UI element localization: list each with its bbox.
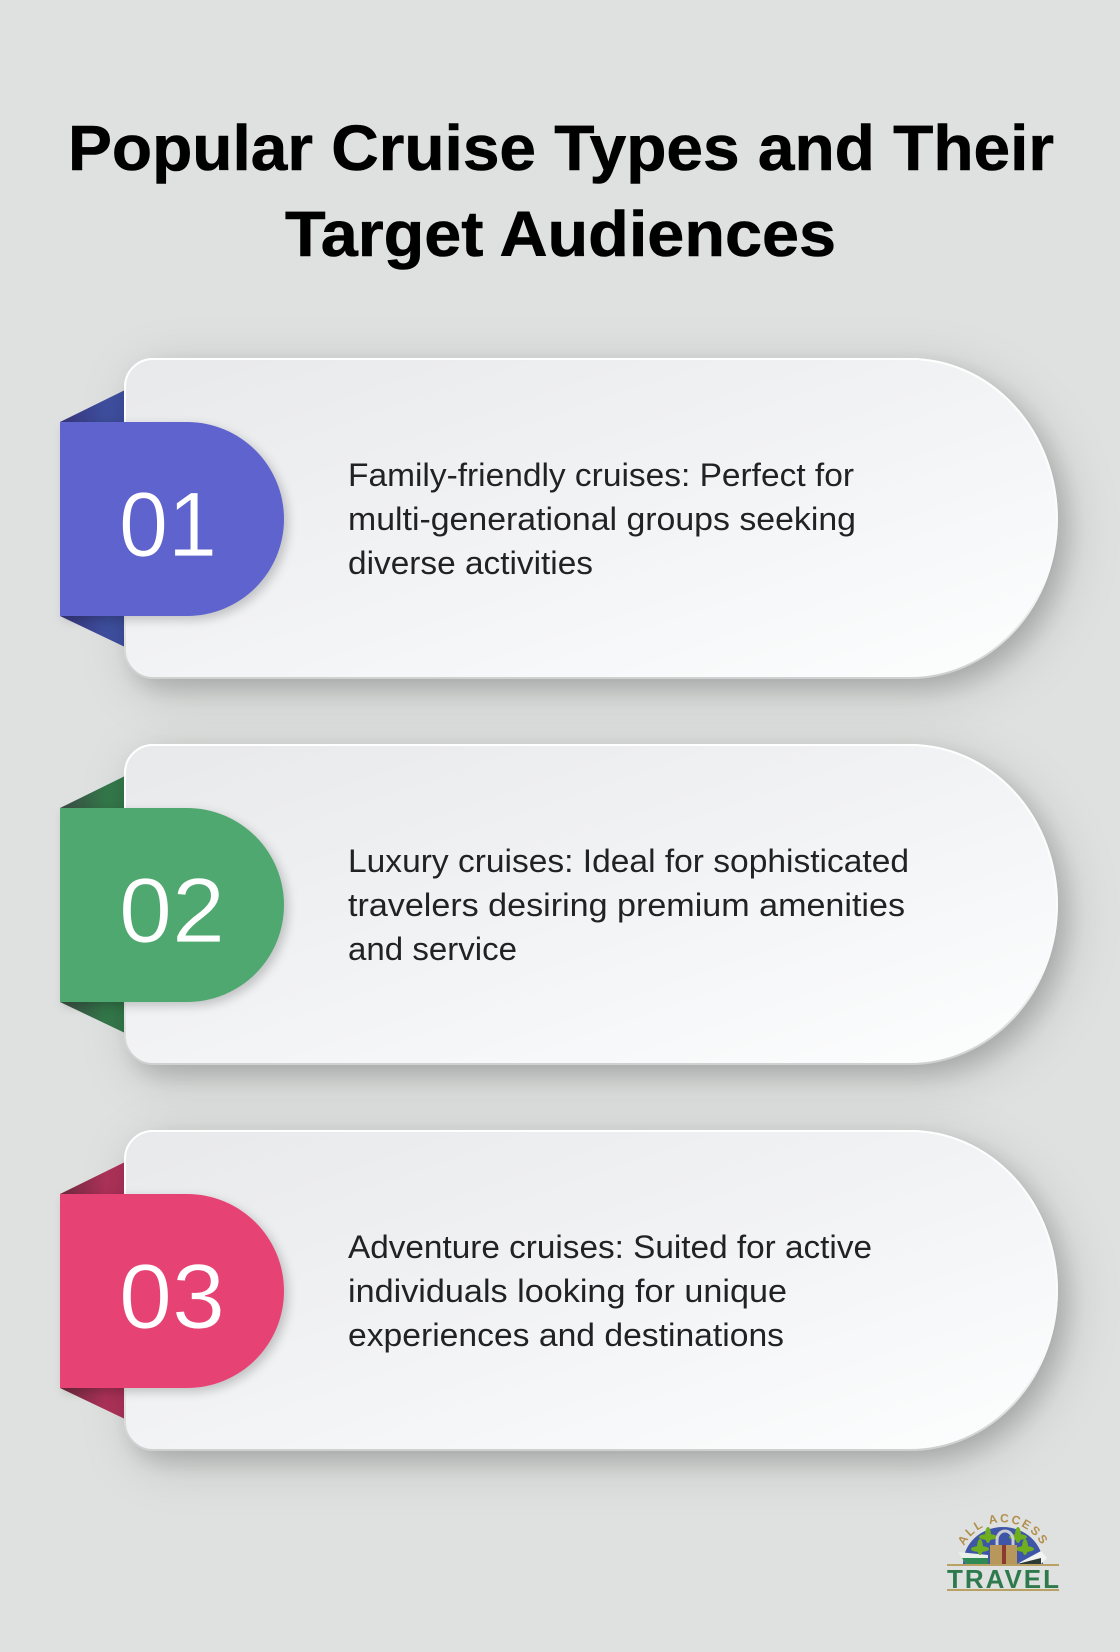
badge 01: 01: [119, 474, 217, 576]
panel: family-friendly cruises: [60, 359, 1057, 678]
title: Popular Cruise Types and Their: [68, 112, 1054, 184]
title: [68, 112, 1054, 270]
description 2: travelers desiring premium amenities: [348, 887, 905, 923]
badge 03: [60, 1194, 284, 1388]
badge 03: 03: [119, 1246, 225, 1348]
badge 01: [60, 422, 284, 616]
description 3: [348, 1229, 872, 1353]
description 1: Family-friendly cruises: Perfect for: [348, 457, 854, 493]
description 2: Luxury cruises: Ideal for sophisticated: [348, 843, 909, 879]
panel: adventure cruises: [60, 1131, 1057, 1450]
logo dome: [963, 1527, 1043, 1564]
description 3: experiences and destinations: [348, 1317, 784, 1353]
logo padlock: [997, 1531, 1013, 1546]
panel: luxury cruises: [60, 745, 1057, 1064]
description 3: Adventure cruises: Suited for active: [348, 1229, 872, 1265]
title: Target Audiences: [285, 198, 836, 270]
logo arc text: ALL ACCESS: [958, 1514, 1048, 1546]
logo rules: [947, 1564, 1059, 1566]
description 1: [348, 457, 856, 581]
fold: green ribbon: [60, 776, 125, 1033]
card 1: [125, 359, 1057, 678]
description 1: diverse activities: [348, 545, 593, 581]
badge 02: 02: [119, 860, 225, 962]
badge 02: [60, 808, 284, 1002]
description 2: and service: [348, 931, 517, 967]
card 3: [125, 1131, 1057, 1450]
logo: All Access Travel: [947, 1514, 1059, 1594]
logo boats: [958, 1552, 988, 1564]
description 2: [348, 843, 909, 967]
logo palms: [971, 1527, 1034, 1555]
fold: pink ribbon: [60, 1162, 125, 1419]
fold: purple ribbon: [60, 390, 125, 647]
description 1: multi-generational groups seeking: [348, 501, 856, 537]
card 2: [125, 745, 1057, 1064]
description 3: individuals looking for unique: [348, 1273, 787, 1309]
logo wordmark: TRAVEL: [947, 1564, 1059, 1594]
